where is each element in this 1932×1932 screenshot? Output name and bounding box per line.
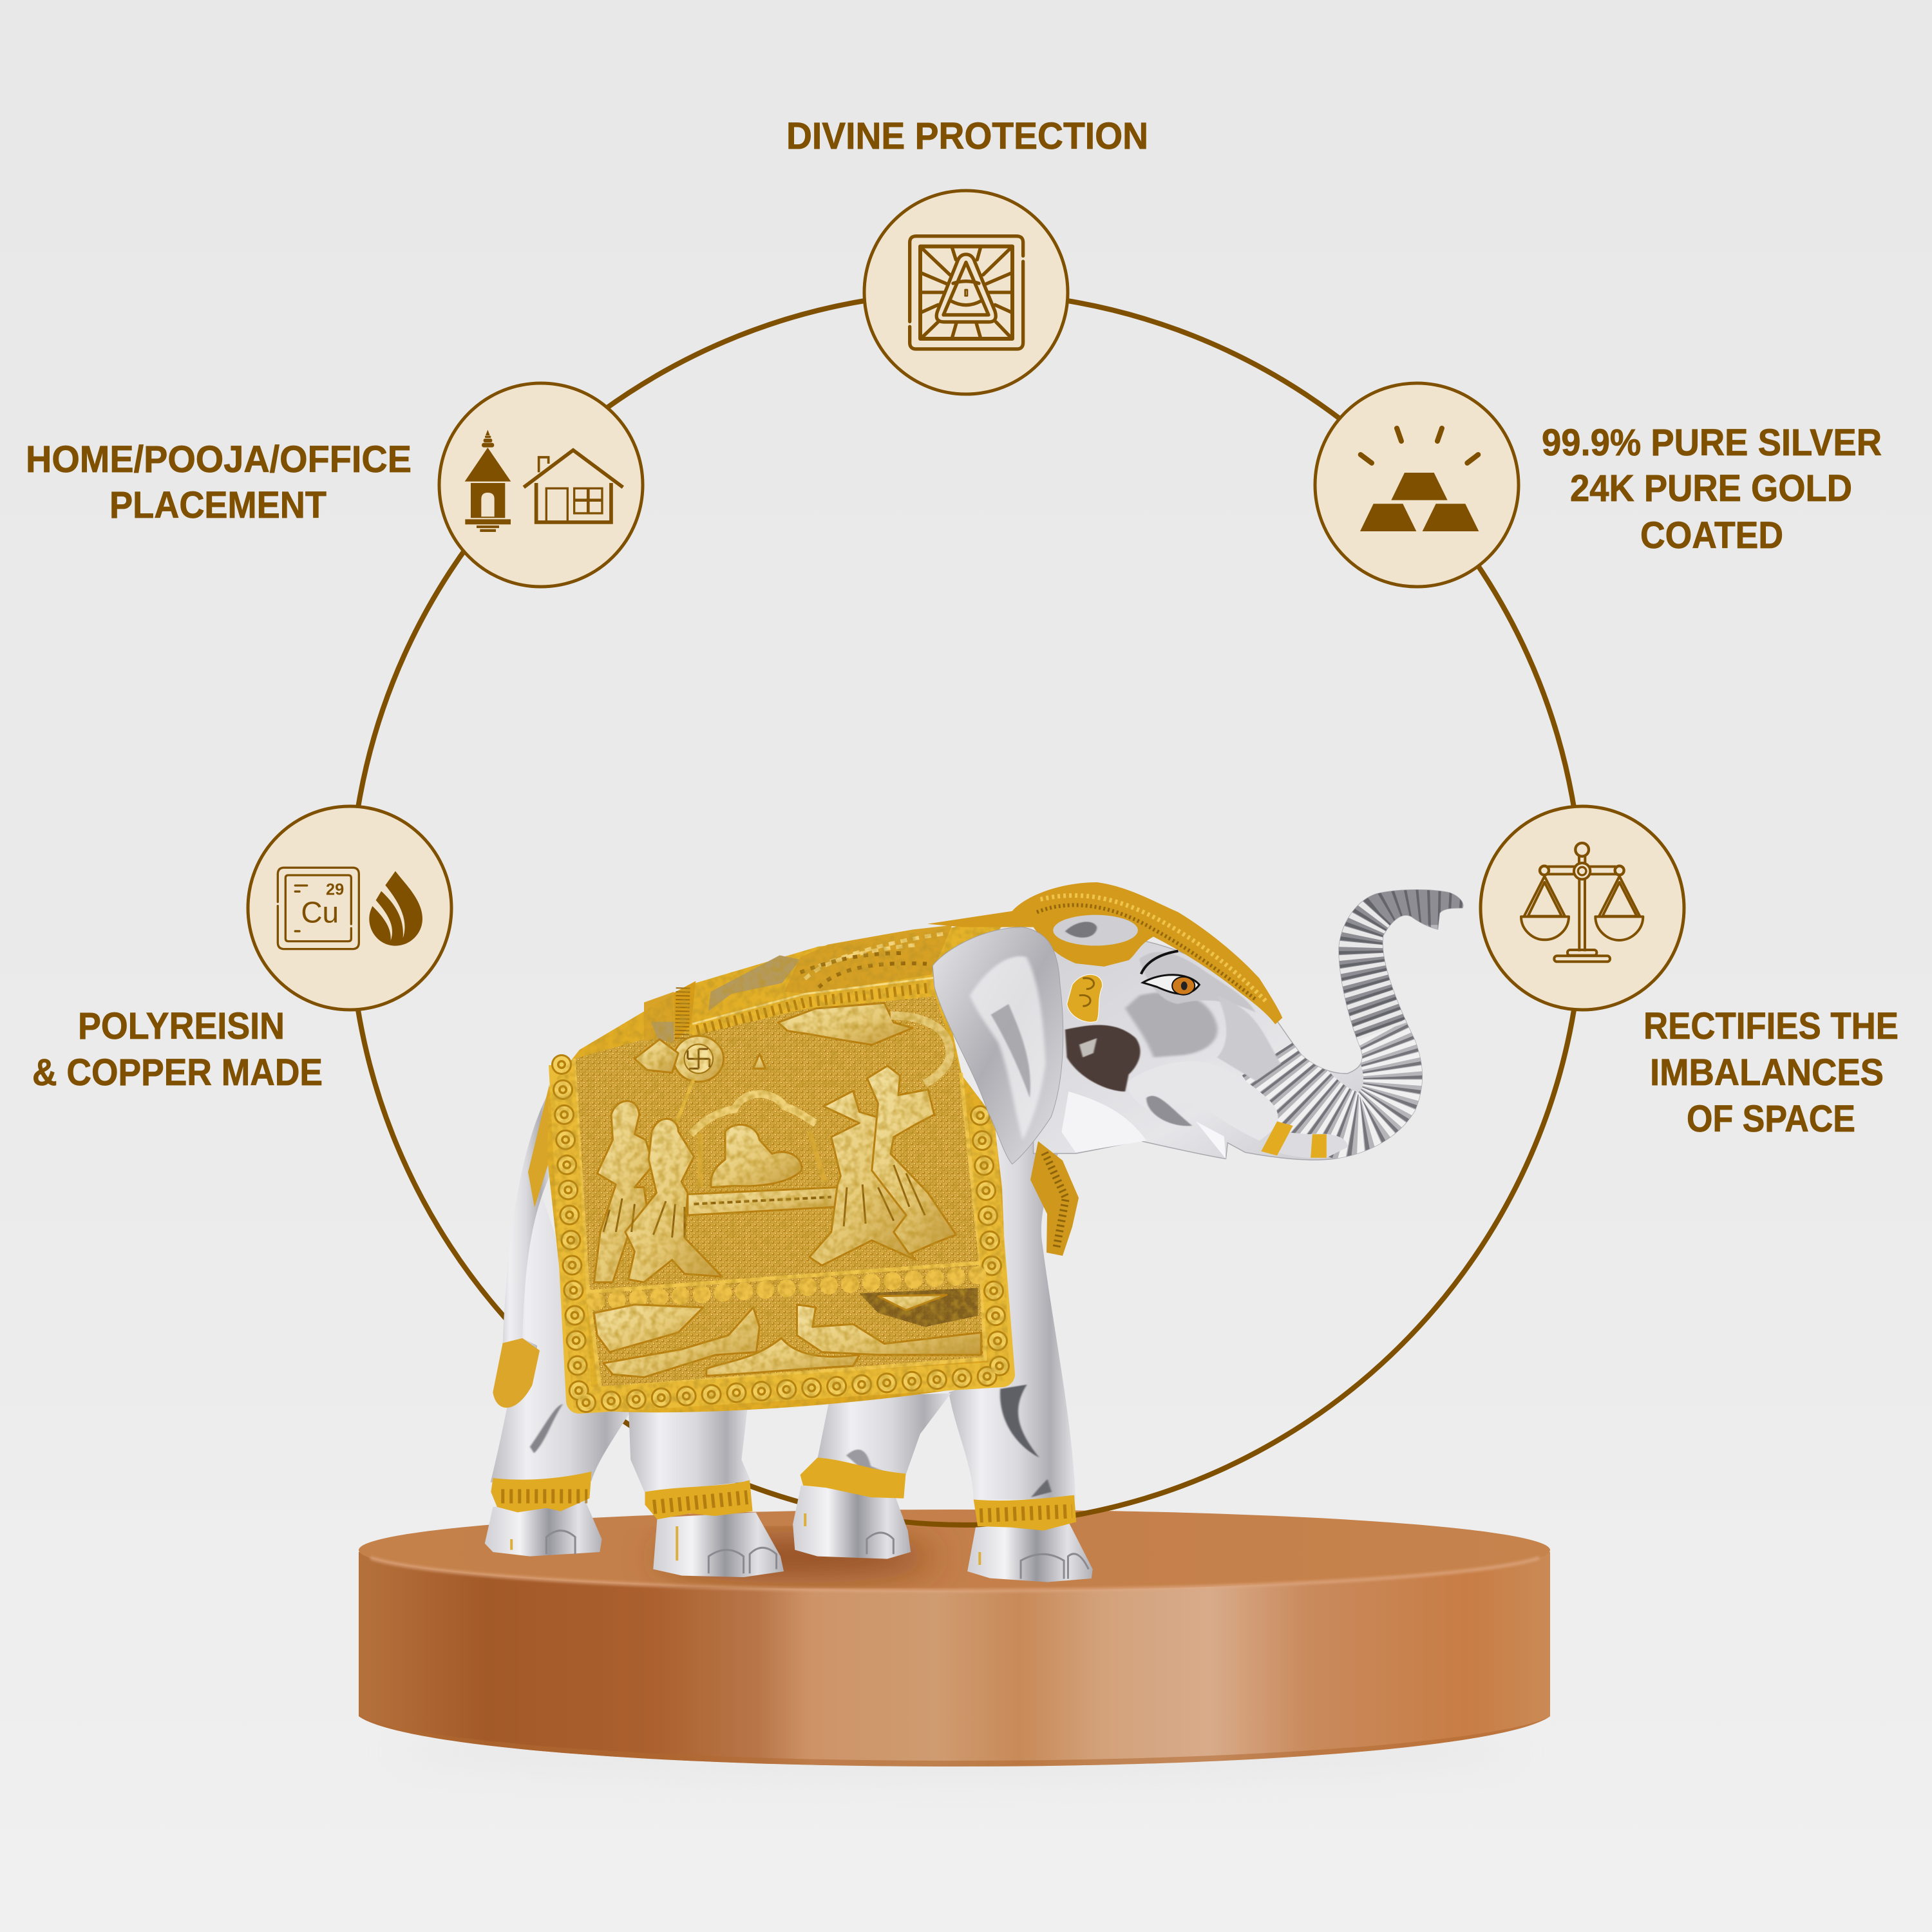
- cape mottled texture: [547, 911, 1016, 1412]
- arch: [691, 1094, 816, 1134]
- forehead ring: [1053, 915, 1138, 945]
- icon: gold bars: [1360, 428, 1479, 531]
- belt scallops: [697, 987, 931, 1030]
- peacock right: [797, 1305, 981, 1355]
- trunk tip: [1274, 1132, 1348, 1158]
- silver body behind cape: [490, 1090, 1075, 1499]
- right bearer two: [867, 1066, 956, 1255]
- near front anklet: [974, 1495, 1076, 1531]
- ring arc over pedestal top: [644, 1434, 1288, 1525]
- peacock left: [603, 1307, 759, 1378]
- tail: [495, 1090, 552, 1406]
- scene panel dots: [574, 996, 981, 1292]
- left bearer one: [594, 1101, 653, 1282]
- trunk gold ring large: [1261, 1121, 1293, 1155]
- left bearer two: [625, 1119, 722, 1282]
- icon: copper element tile: [278, 867, 359, 949]
- ear highlight: [970, 956, 1046, 1141]
- pedestal top surface: [359, 1510, 1550, 1591]
- shrine finial: [753, 1054, 766, 1068]
- trunk gold ring small: [1311, 1134, 1327, 1158]
- heading: pure silver and gold: 24K PURE GOLD: [1570, 468, 1852, 509]
- pedestal bottom edge: [359, 1716, 1550, 1766]
- heading: polyresin and copper: [32, 1005, 323, 1094]
- scalloped belt: [692, 978, 935, 1036]
- near rear leg streak: [530, 1404, 563, 1454]
- near front leg reflection: [1000, 1385, 1039, 1457]
- heading: polyresin and copper: POLYREISIN: [78, 1005, 285, 1047]
- node: rectifies imbalances: [1481, 806, 1684, 1010]
- icon: balance scale: [1521, 843, 1643, 961]
- shaded jaw reflection: [1146, 1096, 1192, 1126]
- far front anklet: [800, 1457, 906, 1499]
- ganesha: [711, 1124, 802, 1188]
- eye: [1143, 975, 1199, 995]
- badge circle: [248, 806, 451, 1010]
- pedestal rim highlight: [370, 1558, 1539, 1591]
- cape outline: [547, 911, 1016, 1412]
- dark reflected cloud: [859, 1288, 978, 1327]
- node: pure silver and gold: [1315, 383, 1519, 587]
- gold cape: [547, 911, 1016, 1412]
- icon: copper element tile: Cu: [301, 896, 339, 929]
- near front ankle streak: [1031, 1479, 1052, 1497]
- heading: rectifies imbalances: IMBALANCES: [1650, 1052, 1884, 1094]
- far front leg smudge: [846, 1450, 887, 1473]
- chest highlight: [1061, 1092, 1146, 1152]
- pedestal side: [359, 1552, 1550, 1766]
- horn: [891, 1016, 950, 1084]
- tassel strip: [528, 1084, 554, 1208]
- icon: temple: [465, 430, 511, 532]
- panel frame lines: [574, 1059, 985, 1388]
- forehead plane: [1139, 952, 1256, 1012]
- heading: polyresin and copper: & COPPER MADE: [32, 1052, 323, 1094]
- leaf highlights: [805, 934, 943, 979]
- mouth and lower lip: [1128, 1061, 1278, 1141]
- upper cape relief: [644, 925, 952, 1043]
- necklace texture: [1045, 1153, 1066, 1249]
- icon: copper element tile: 29: [326, 880, 344, 898]
- node: polyresin and copper: [248, 806, 451, 1010]
- heading: placement: PLACEMENT: [109, 484, 327, 526]
- crown texture light: [1041, 895, 1267, 1002]
- ribs dark: [1272, 896, 1475, 1128]
- crown texture dark: [1037, 905, 1256, 999]
- far front foot: [793, 1486, 911, 1559]
- connecting ring: [350, 292, 1582, 1525]
- head silhouette: [1034, 890, 1463, 1160]
- dark reflection on cheek: [1065, 1025, 1141, 1092]
- icon: oil drop: [369, 871, 422, 946]
- grey face plane: [1125, 992, 1217, 1057]
- left shoulder relief: [644, 992, 674, 1041]
- right bearer one: [810, 1091, 916, 1265]
- bright cloud inlay: [878, 1295, 947, 1310]
- heading: placement: [26, 439, 412, 526]
- heading: rectifies imbalances: RECTIFIES THE: [1643, 1005, 1899, 1047]
- ridge stripes: [682, 987, 683, 1039]
- ornamental ring border: [562, 1065, 1002, 1403]
- node: placement: [439, 383, 643, 587]
- badge circle: [864, 191, 1068, 394]
- heading: rectifies imbalances: [1643, 1005, 1899, 1140]
- foot gold streaks: [511, 1513, 980, 1565]
- near front foot: [967, 1521, 1093, 1582]
- ear: [933, 927, 1063, 1164]
- far rear leg: [629, 1406, 751, 1493]
- node: divine protection: [864, 191, 1068, 394]
- ear ornament scroll: [1079, 978, 1094, 1006]
- left cloud: [634, 1039, 678, 1073]
- brow: [1141, 951, 1178, 974]
- neck necklace: [1030, 1141, 1079, 1256]
- trunk base tone: [1272, 896, 1475, 1128]
- palanquin platform: [688, 1188, 837, 1215]
- heading: pure silver and gold: [1542, 422, 1882, 556]
- right pleats: [844, 1165, 925, 1226]
- ear shadow: [991, 1004, 1030, 1098]
- near rear haunch: [490, 1183, 634, 1482]
- icon: house: [524, 450, 623, 522]
- toe arches: [546, 1531, 1088, 1579]
- elephant figurine: [485, 882, 1475, 1582]
- medallion pole: [675, 1078, 694, 1126]
- badge circle: [1481, 806, 1684, 1010]
- ear ornament: [1067, 974, 1103, 1022]
- ribs bright: [1272, 911, 1399, 1128]
- leaf shadows: [800, 953, 927, 987]
- tusk: [1196, 1121, 1226, 1159]
- mottled leaves: [784, 925, 952, 994]
- swastika medallion: [674, 1036, 724, 1082]
- platform inlay: [694, 1197, 831, 1204]
- lower legs, feet and anklets: [485, 1385, 1093, 1582]
- forehead ring reflection: [1065, 922, 1097, 938]
- pedestal: [359, 1434, 1550, 1781]
- icon: yantra with triangle and eye: [910, 236, 1023, 349]
- near rear foot: [485, 1499, 602, 1557]
- arch pillars: [700, 1132, 825, 1188]
- far front leg: [817, 1393, 951, 1475]
- lower panel dots: [588, 1263, 985, 1388]
- elephant shadow: [657, 1543, 934, 1571]
- badge circle: [1315, 383, 1519, 587]
- heading: placement: HOME/POOJA/OFFICE: [26, 439, 412, 480]
- cheek reflection light spot: [1079, 1038, 1097, 1057]
- badge circle: [439, 383, 643, 587]
- trunk shading and ribs: [1272, 896, 1475, 1128]
- heading: rectifies imbalances: OF SPACE: [1687, 1098, 1855, 1140]
- crown band: [927, 882, 1282, 1024]
- cheek plane highlight: [1217, 996, 1280, 1081]
- scallop band: [596, 1275, 978, 1302]
- near rear anklet: [491, 1472, 592, 1512]
- central ornament: [706, 1338, 859, 1376]
- tail tuft: [493, 1338, 540, 1408]
- heading: pure silver and gold: 99.9% PURE SILVER: [1542, 422, 1882, 464]
- anklet scallops: [501, 1496, 1072, 1515]
- heading: pure silver and gold: COATED: [1640, 515, 1783, 556]
- cloud: [778, 1003, 913, 1045]
- pale reflection patch: [708, 955, 800, 1011]
- heading: divine protection: DIVINE PROTECTION: [786, 115, 1148, 157]
- far rear anklet: [645, 1480, 753, 1519]
- far rear foot: [653, 1512, 784, 1577]
- left shoulder reflection: [651, 1022, 674, 1043]
- elephant face and ear: [927, 882, 1348, 1164]
- trunk upper dark tone: [1363, 896, 1475, 1030]
- relief scene: palanquin procession: [594, 1003, 981, 1378]
- lower cloud left: [594, 1305, 703, 1352]
- skirt pleats: [603, 1198, 685, 1238]
- near front upper leg: [949, 1140, 1075, 1499]
- vertical ridge band: [674, 981, 696, 1042]
- floor shadow: [389, 1723, 1522, 1781]
- belt line: [692, 978, 934, 1024]
